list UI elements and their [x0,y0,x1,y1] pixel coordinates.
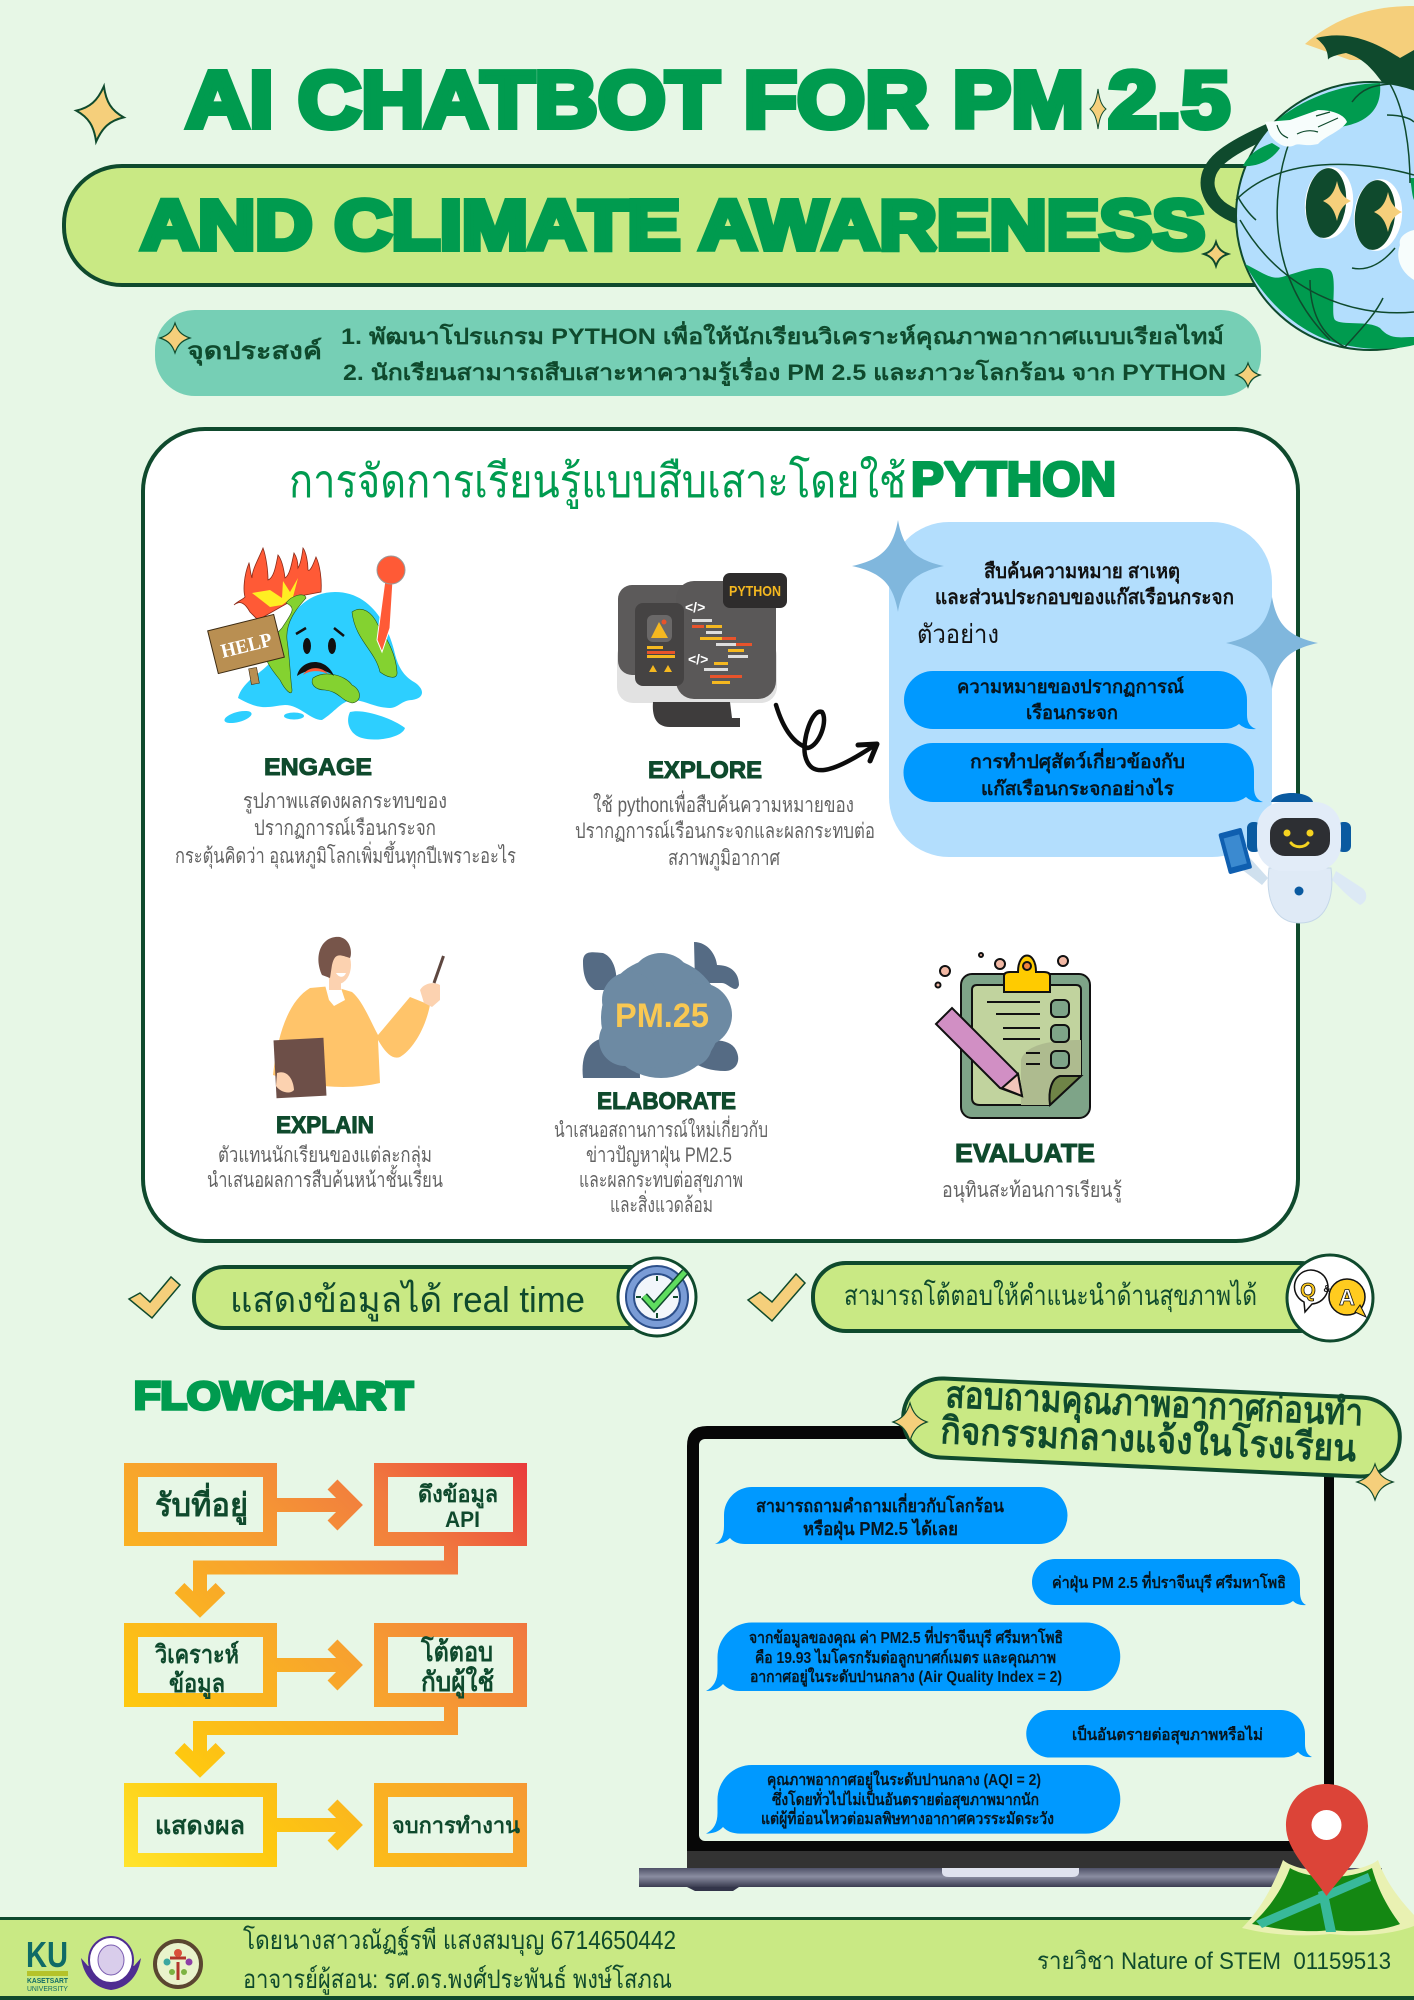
icon: Q and A [1287,1255,1373,1341]
icon: robot [1218,793,1366,923]
panel: example questions [852,520,1318,857]
footer author: โดยนางสาวณัฏฐ์รพี แสงสมบุญ 6714650442 [243,1925,676,1956]
flowchart [131,1470,520,1860]
banner: check air quality: กิจกรรมกลางแจ้งในโรงเรียน [940,1408,1357,1469]
title line 1: AI CHATBOT FOR PM 2.5 [186,55,1230,144]
chat: user follow-up [1026,1710,1312,1758]
icon: python code device: </> [688,651,708,667]
panel heading: การจัดการเรียนรู้แบบสืบเสาะโดยใช้ [289,455,906,509]
icon: Q and A: A [1339,1285,1355,1310]
EXPLORE heading: EXPLORE [648,757,762,784]
chat: bot safety answer [706,1765,1120,1834]
banner: check air quality [893,1374,1402,1500]
icon: clock [618,1258,696,1336]
step: receive address [131,1470,270,1539]
chat bubble: livestock [904,743,1263,802]
icon: melting earth [208,548,422,740]
ENGAGE heading: ENGAGE [264,754,372,781]
icon: python code device [617,573,787,727]
chat bubble: meaning: ความหมายของปรากฏการณ์ [957,676,1184,698]
EXPLAIN description: ตัวแทนนักเรียนของแต่ละกลุ่ม [218,1144,432,1168]
chat: user follow-up: เป็นอันตรายต่อสุขภาพหรือไม่ [1072,1723,1263,1745]
panel title [935,560,1234,609]
step: fetch API: API [445,1507,480,1532]
chat bubble: meaning [904,671,1256,729]
chat: bot safety answer: คุณภาพอากาศอยู่ในระดับปานกลาง (AQI = 2) [767,1770,1041,1791]
icon: melting earth: HELP [219,629,274,663]
step: fetch API: ดึงข้อมูล [418,1481,498,1509]
flow connectors [180,1484,451,1846]
chat: bot answer: อากาศอยู่ในระดับปานกลาง (Air Quality Index = 2) [750,1667,1062,1688]
EXPLAIN description [207,1144,443,1192]
chat: user question [1032,1559,1306,1605]
ELABORATE description: และสิ่งแวดล้อม [610,1190,713,1217]
feature: real time [129,1258,696,1336]
ELABORATE description: นำเสนอสถานการณ์ใหม่เกี่ยวกับ [554,1115,768,1142]
ELABORATE description: ข่าวปัญหาฝุ่น PM2.5 [586,1144,732,1168]
flowchart heading: FLOWCHART [134,1375,413,1418]
chat: user question: ค่าฝุ่น PM 2.5 ที่ปราจีนบุรี ศรีมหาโพธิ [1052,1571,1286,1593]
ENGAGE description [175,790,516,869]
step: analyse [131,1630,270,1700]
EXPLORE description: ปรากฏการณ์เรือนกระจกและผลกระทบต่อ [575,819,875,843]
step: respond: กับผู้ใช้ [421,1666,494,1699]
chat bubble: meaning: เรือนกระจก [1026,702,1118,724]
chat: bot answer [706,1622,1120,1691]
step: finish: จบการทำงาน [392,1813,520,1838]
ELABORATE description [554,1115,768,1217]
panel title: และส่วนประกอบของแก๊สเรือนกระจก [935,586,1234,609]
chat: bot answer: คือ 19.93 ไมโครกรัมต่อลูกบาศก์เมตร และคุณภาพ [755,1647,1056,1669]
objectives label: จุดประสงค์ [187,337,322,367]
EXPLORE description: ใช้ pythonเพื่อสืบค้นความหมายของ [593,790,854,817]
ENGAGE description: ปรากฏการณ์เรือนกระจก [254,816,436,840]
step: receive address: รับที่อยู่ [155,1482,248,1526]
panel: inquiry learning [143,429,1366,1241]
objective 2: 2. นักเรียนสามารถสืบเสาะหาความรู้เรื่อง PM 2.5 และภาวะโลกร้อน จาก PYTHON [343,356,1226,387]
heading PYTHON: PYTHON [911,454,1116,506]
chat: prompt: หรือฝุ่น PM2.5 ได้เลย [803,1518,958,1541]
logo: Kasetsart University: KASETSART [27,1978,69,1985]
icon: PM2.5 cloud [583,942,739,1078]
title pill [64,166,1364,285]
ELABORATE heading: ELABORATE [597,1088,736,1115]
arrow: squiggle to blue panel [776,705,877,770]
feature: health advice [748,1255,1373,1341]
step: finish [381,1790,520,1860]
chat bubble: livestock: แก๊สเรือนกระจกอย่างไร [981,777,1175,800]
step: respond: โต้ตอบ [420,1635,493,1667]
icon: map pin [1242,1784,1414,1935]
logo: faculty seal [81,1937,141,1990]
ENGAGE description: กระตุ้นคิดว่า อุณหภูมิโลกเพิ่มขึ้นทุกปีเพราะอะไร [175,841,516,869]
EXPLAIN heading: EXPLAIN [276,1112,374,1139]
icon: teacher [273,937,444,1098]
logo: science education [155,1941,201,1987]
objective stars [160,323,1260,387]
ELABORATE description: และผลกระทบต่อสุขภาพ [579,1169,743,1193]
check icon [129,1277,180,1318]
laptop frame [639,1426,1382,1891]
logo: Kasetsart University: UNIVERSITY [27,1986,68,1993]
chat bubble: livestock: การทำปศุสัตว์เกี่ยวข้องกับ [970,748,1185,774]
footer advisor: อาจารย์ผู้สอน: รศ.ดร.พงศ์ประพันธ์ พงษ์โสภณ [243,1964,672,1995]
check icon [748,1274,805,1321]
logo: Kasetsart University [26,1934,69,1993]
label: แสดงข้อมูลได้ real time [230,1279,585,1322]
icon: Q and A: Q [1300,1280,1316,1302]
EXPLORE description [575,790,875,871]
decorative stars [852,520,1318,689]
EVALUATE description: อนุทินสะท้อนการเรียนรู้ [942,1179,1122,1203]
chat: bot safety answer: ซึ่งโดยทั่วไปไม่เป็นอันตรายต่อสุขภาพมากนัก [772,1788,1039,1810]
decorative stars near title [72,83,1228,266]
step: display [131,1790,270,1860]
chat: bot answer: จากข้อมูลของคุณ ค่า PM2.5 ที่ปราจีนบุรี ศรีมหาโพธิ [749,1626,1063,1649]
step: fetch API [381,1470,520,1539]
step: respond [381,1630,520,1700]
icon: python code device: </> [685,599,705,615]
chat: prompt: สามารถถามคำถามเกี่ยวกับโลกร้อน [756,1493,1005,1516]
chat: prompt [715,1487,1068,1544]
panel title: สืบค้นความหมาย สาเหตุ [984,560,1180,584]
logo: Kasetsart University: KU [26,1934,68,1975]
EXPLAIN description: นำเสนอผลการสืบค้นหน้าชั้นเรียน [207,1165,443,1192]
ENGAGE description: รูปภาพแสดงผลกระทบของ [243,790,447,814]
EVALUATE heading: EVALUATE [955,1138,1095,1168]
icon: PM2.5 cloud: PM.25 [615,997,709,1035]
step: display: แสดงผล [155,1812,245,1840]
chat: bot safety answer: แต่ผู้ที่อ่อนไหวต่อมลพิษทางอากาศควรระมัดระวัง [761,1807,1054,1830]
panel: objectives [155,310,1261,396]
laptop chat mockup [639,1426,1382,1891]
example label: ตัวอย่าง [917,619,999,649]
footer course: รายวิชา Nature of STEM 01159513 [1037,1948,1391,1975]
title line 2: AND CLIMATE AWARENESS [141,186,1205,264]
EXPLORE description: สภาพภูมิอากาศ [668,847,781,871]
step: analyse: วิเคราะห์ [154,1640,239,1669]
objective 1: 1. พัฒนาโปรแกรม PYTHON เพื่อให้นักเรียนวิเคราะห์คุณภาพอากาศแบบเรียลไทม์ [341,320,1224,351]
icon: python code device: PYTHON [729,583,781,600]
footer bar [0,1917,1414,2000]
step: analyse: ข้อมูล [169,1670,225,1700]
icon: Q and A: & [1323,1284,1331,1295]
label: สามารถโต้ตอบให้คำแนะนำด้านสุขภาพได้ [844,1279,1257,1313]
globe mascot [1208,6,1414,350]
icon: clipboard and pencil [936,953,1090,1118]
